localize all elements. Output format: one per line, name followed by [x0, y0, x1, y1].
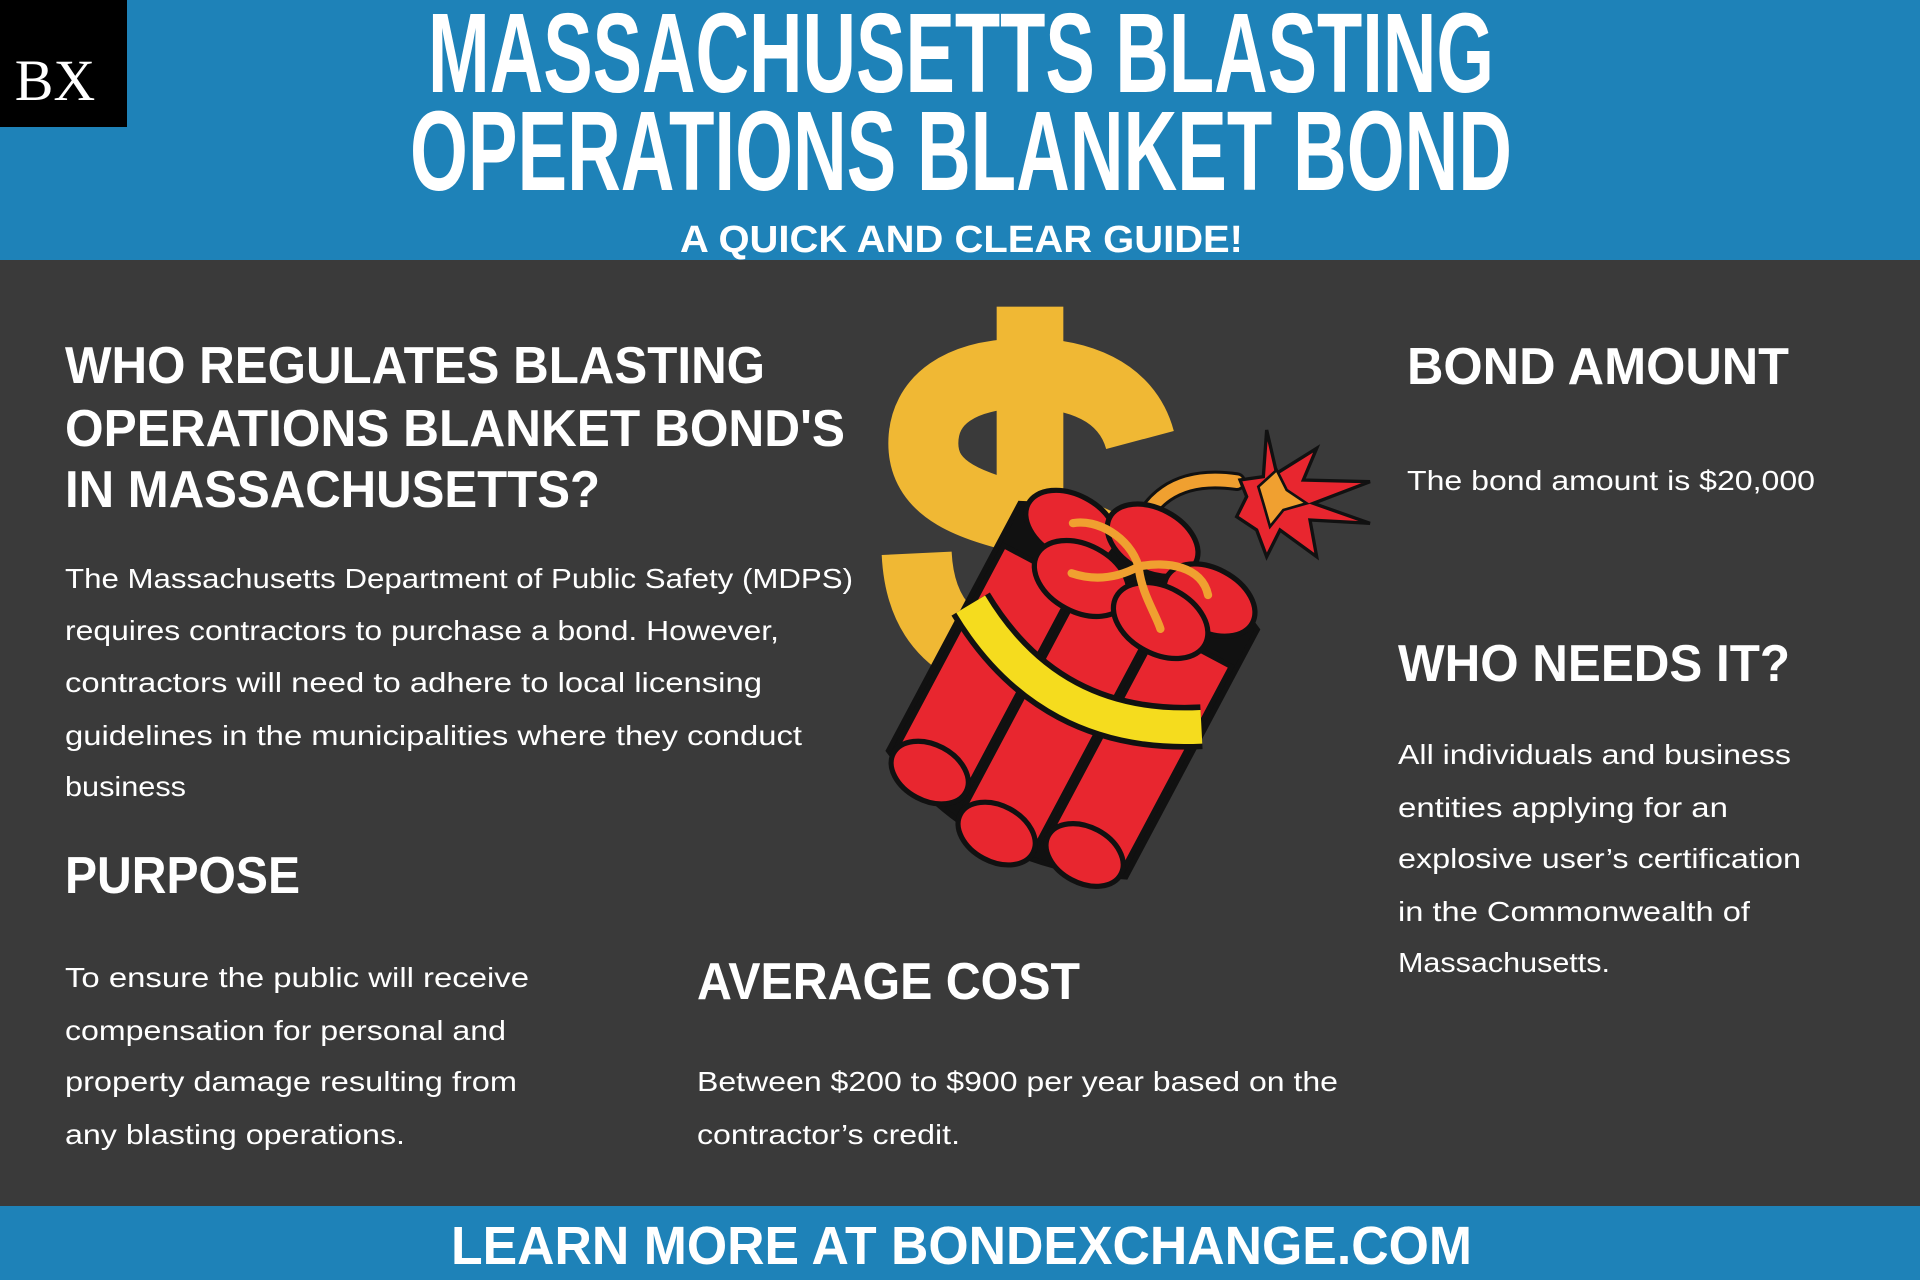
icon: dollar sign — [917, 307, 1140, 740]
text: average cost body: Between $200 to $900 per year based on the — [697, 1066, 1338, 1097]
heading: purpose: PURPOSE — [65, 847, 300, 905]
text: purpose body: any blasting operations. — [65, 1119, 405, 1150]
panel: who needs it — [1398, 635, 1801, 978]
text: purpose body: property damage resulting from — [65, 1066, 517, 1097]
text: who needs it body: Massachusetts. — [1398, 947, 1610, 978]
logo: BX: BX — [15, 48, 95, 113]
subtitle: A QUICK AND CLEAR GUIDE! — [680, 219, 1243, 261]
text: purpose body — [65, 962, 529, 1150]
icon: spark — [1237, 430, 1370, 557]
text: who needs it body: explosive user’s certification — [1398, 843, 1801, 874]
illustration: dollar sign and dynamite — [882, 306, 1370, 889]
logo: BX — [0, 0, 127, 127]
text: who regulates body: guidelines in the municipalities where they conduct — [65, 720, 802, 751]
icon: fuse — [1133, 480, 1237, 557]
text: who regulates body: contractors will need to adhere to local licensing — [65, 667, 762, 698]
heading: average cost: AVERAGE COST — [697, 953, 1080, 1011]
footer text: LEARN MORE AT BONDEXCHANGE.COM — [451, 1216, 1472, 1276]
text: purpose body: compensation for personal and — [65, 1015, 506, 1046]
text: bond amount body: The bond amount is $20,000 — [1407, 465, 1815, 496]
panel: who regulates — [65, 337, 853, 802]
heading: bond amount: BOND AMOUNT — [1407, 338, 1789, 396]
text: who regulates body: requires contractors to purchase a bond. However, — [65, 615, 779, 646]
text: who needs it body: entities applying for an — [1398, 792, 1728, 823]
panel: bond amount — [1407, 338, 1815, 496]
title — [410, 0, 1512, 214]
heading: who needs it: WHO NEEDS IT? — [1398, 635, 1790, 693]
icon: dynamite bundle — [865, 449, 1286, 921]
text: purpose body: To ensure the public will receive — [65, 962, 529, 993]
text: average cost body — [697, 1066, 1338, 1150]
text: who regulates body: The Massachusetts Department of Public Safety (MDPS) — [65, 563, 853, 594]
text: who regulates body — [65, 563, 853, 802]
text: who needs it body: in the Commonwealth of — [1398, 896, 1750, 927]
footer band — [0, 1206, 1920, 1280]
text: average cost body: contractor’s credit. — [697, 1119, 960, 1150]
heading: who regulates: IN MASSACHUSETTS? — [65, 461, 600, 519]
heading: who regulates: WHO REGULATES BLASTING — [65, 337, 765, 395]
text: who regulates body: business — [65, 771, 186, 802]
text: who needs it body: All individuals and business — [1398, 739, 1791, 770]
heading: who regulates: OPERATIONS BLANKET BOND'S — [65, 400, 845, 458]
heading: who regulates — [65, 337, 845, 519]
panel: average cost — [697, 953, 1338, 1150]
panel: purpose — [65, 847, 529, 1150]
text: who needs it body — [1398, 739, 1801, 978]
header band — [0, 0, 1920, 261]
